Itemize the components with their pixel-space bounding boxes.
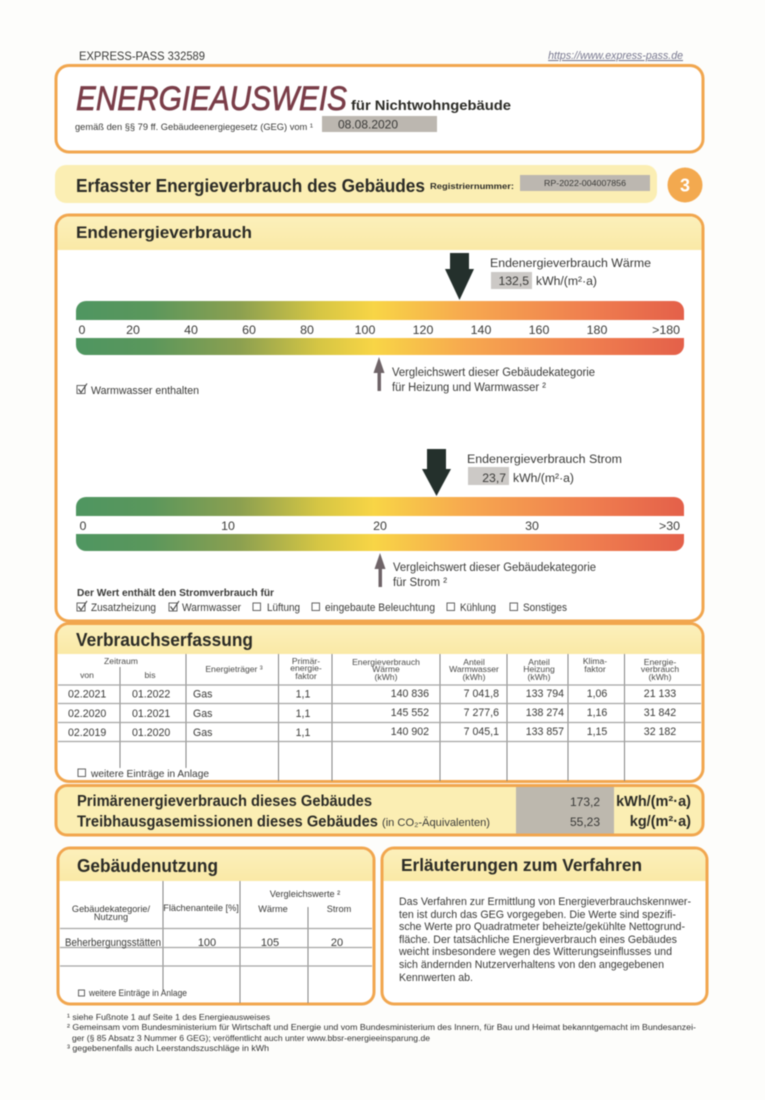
checkbox row: Warmwasser — [182, 602, 241, 614]
table grid — [58, 654, 701, 781]
arrow: electricity comparison — [374, 553, 386, 587]
table header: Flächenanteile [%] — [163, 903, 239, 913]
explanation text: fläche. Der tatsächliche Energieverbrauch eines Gebäudes — [399, 934, 677, 946]
panel: Endenergieverbrauch — [56, 215, 703, 621]
title: ENERGIEAUSWEIS — [76, 80, 347, 118]
heading: Gebäudenutzung — [77, 856, 218, 876]
legal basis: gemäß den §§ 79 ff. Gebäudeenergiegesetz (GEG) vom ¹ — [75, 121, 313, 132]
emissions row — [77, 814, 691, 830]
scale labels: heat: >180 — [652, 323, 680, 337]
arrow: heat comparison — [374, 357, 384, 391]
scale labels: heat: 100 — [355, 323, 375, 337]
scale labels: heat: 160 — [529, 323, 549, 337]
table header: Anteil — [463, 657, 485, 667]
primary energy row: kWh/(m²·a) — [616, 794, 691, 810]
footnotes: ger (§ 85 Absatz 3 Nummer 6 GEG); veröffentlicht auch unter www.bbsr-energieeinsparung.de — [72, 1033, 430, 1043]
table row: 100 — [198, 937, 216, 949]
table header: Warmwasser — [449, 664, 499, 674]
scale labels: electricity — [80, 519, 680, 533]
footnotes: ³ gegebenenfalls auch Leerstandszuschläge in kWh — [67, 1043, 269, 1053]
table header: verbrauch — [641, 664, 679, 674]
table row 2019: 7 045,1 — [464, 726, 499, 738]
checkbox row: Sonstiges — [523, 602, 567, 614]
table header: Klima- — [583, 656, 607, 666]
table header: faktor — [295, 671, 317, 681]
checkbox: hot water included: Warmwasser enthalten — [91, 385, 199, 397]
emissions row: Treibhausgasemissionen dieses Gebäudes — [77, 814, 378, 830]
table header: (kWh) — [463, 672, 486, 682]
table header: Anteil — [528, 657, 550, 667]
table header — [72, 889, 352, 922]
table header: Gebäudekategorie/ — [72, 904, 151, 914]
date field — [322, 116, 437, 132]
arrow: heat value — [445, 253, 474, 300]
table header: (kWh) — [528, 672, 551, 682]
scale bar: heat top — [76, 301, 684, 320]
panel: Gebäudenutzung — [58, 848, 374, 1004]
table row 2019: 133 857 — [526, 726, 564, 738]
section banner — [55, 165, 657, 203]
table row: 105 — [261, 937, 279, 949]
table row 2021: 140 836 — [391, 688, 429, 700]
heat value label: 132,5 — [498, 274, 529, 288]
heat value label: Endenergieverbrauch Wärme — [490, 256, 651, 270]
date field: 08.08.2020 — [338, 118, 398, 132]
scale labels: electricity: 0 — [80, 519, 87, 533]
section heading: Erfasster Energieverbrauch des Gebäudes — [76, 176, 425, 196]
table row 2021: 133 794 — [526, 688, 564, 700]
emissions row: 55,23 — [570, 815, 600, 829]
explanation text — [398, 896, 691, 984]
primary energy row — [77, 793, 691, 810]
table row 2021: 7 041,8 — [464, 688, 499, 700]
checkbox row: Zusatzheizung — [91, 602, 156, 614]
table row 2021: 1,1 — [296, 688, 310, 700]
electricity comparison label: für Strom ² — [393, 575, 447, 589]
panel: title — [56, 66, 703, 152]
table row 2020: 1,1 — [296, 708, 310, 720]
scale labels: electricity: 30 — [525, 519, 539, 533]
table header — [80, 656, 679, 682]
table row 2020: 31 842 — [644, 707, 676, 719]
explanation text: Kennwerten ab. — [399, 972, 473, 984]
website link: https://www.express-pass.de — [548, 50, 683, 62]
table header: Wärme — [258, 904, 288, 914]
scale labels: heat — [79, 323, 680, 337]
table row 2019: 1,1 — [296, 727, 310, 739]
page number badge: 3 — [680, 176, 690, 196]
table row — [65, 937, 343, 949]
table header: faktor — [584, 664, 606, 674]
checkbox row: Kühlung — [460, 602, 496, 614]
scale labels: heat: 120 — [413, 323, 433, 337]
table header: Heizung — [523, 664, 555, 674]
scale bar: electricity bottom — [76, 534, 684, 551]
table row 2020: 1,16 — [587, 707, 607, 719]
table header: Nutzung — [94, 912, 128, 922]
scale labels: heat: 140 — [471, 323, 491, 337]
table row: 20 — [331, 937, 343, 949]
table row 2021: 02.2021 — [68, 688, 106, 700]
table row 2019: 01.2020 — [132, 727, 170, 739]
table row 2021 — [68, 688, 676, 700]
electricity comparison label — [393, 560, 596, 589]
table row 2020: 7 277,6 — [464, 707, 499, 719]
table row 2021: 01.2022 — [132, 688, 170, 700]
table row 2020: 01.2021 — [132, 708, 170, 720]
further entries checkbox: weitere Einträge in Anlage — [90, 769, 209, 780]
page number badge — [668, 168, 702, 202]
table row 2020: 145 552 — [391, 707, 429, 719]
electricity contents note: Der Wert enthält den Stromverbrauch für — [77, 588, 274, 599]
table row 2021: 21 133 — [644, 688, 676, 700]
table header: Energie- — [644, 657, 676, 667]
table row: Beherbergungsstätten — [65, 937, 161, 949]
electricity value label: 23,7 — [482, 471, 506, 485]
table row 2019: 02.2019 — [68, 727, 106, 739]
electricity value label: kWh/(m²·a) — [513, 471, 574, 485]
scale labels: heat: 20 — [126, 323, 140, 337]
further entries checkbox: weitere Einträge in Anlage — [88, 987, 187, 998]
table row 2019 — [68, 726, 676, 739]
registration label: Registriernummer: — [430, 181, 514, 191]
registration number: RP-2022-004007856 — [544, 178, 626, 188]
heat value label: kWh/(m²·a) — [536, 274, 597, 288]
scale labels: electricity: >30 — [659, 519, 680, 533]
emissions row: kg/(m²·a) — [630, 814, 691, 830]
registration number — [520, 175, 650, 191]
footnotes: ² Gemeinsam vom Bundesministerium für Wirtschaft und Energie und vom Bundesministerium des Innern, für Bau und Heimat bekanntgemacht im Bundesanzei- — [67, 1022, 696, 1032]
explanation text: Das Verfahren zur Ermittlung von Energieverbrauchskennwer- — [399, 896, 691, 908]
table row 2020: 02.2020 — [68, 708, 106, 720]
table header: Zeitraum — [104, 656, 138, 666]
scale labels: heat: 80 — [300, 323, 314, 337]
table row 2019: 140 902 — [391, 726, 429, 738]
explanation text: sche Werte pro Quadratmeter beheizte/gekühlte Nettogrund- — [399, 921, 685, 933]
subtitle: für Nichtwohngebäude — [351, 97, 511, 113]
primary energy row: 173,2 — [570, 795, 600, 809]
footnotes: ¹ siehe Fußnote 1 auf Seite 1 des Energieausweises — [67, 1012, 270, 1022]
heading: Endenergieverbrauch — [76, 223, 252, 242]
heat comparison label: für Heizung und Warmwasser ² — [392, 380, 546, 394]
electricity value label: Endenergieverbrauch Strom — [467, 452, 622, 466]
scale labels: heat: 0 — [79, 323, 86, 337]
table header: bis — [144, 670, 156, 680]
scale labels: heat: 40 — [184, 323, 198, 337]
panel: Erläuterungen — [382, 848, 707, 1004]
heat comparison label: Vergleichswert dieser Gebäudekategorie — [392, 365, 595, 379]
electricity comparison label: Vergleichswert dieser Gebäudekategorie — [393, 560, 596, 574]
table header: (kWh) — [649, 672, 672, 682]
table header: Strom — [327, 904, 352, 914]
table header: Primär- — [292, 656, 320, 666]
table row 2021: Gas — [193, 688, 212, 700]
table row 2020: Gas — [193, 708, 212, 720]
document id: EXPRESS-PASS 332589 — [79, 51, 205, 63]
table row 2020 — [68, 707, 676, 720]
value field background — [516, 787, 614, 834]
heading: Erläuterungen zum Verfahren — [401, 855, 642, 875]
table grid — [60, 881, 372, 1003]
primary energy row: Primärenergieverbrauch dieses Gebäudes — [77, 793, 372, 810]
table header: Wärme — [372, 664, 400, 674]
table header: (kWh) — [375, 672, 398, 682]
table header: energie- — [290, 663, 322, 673]
scale labels: electricity: 20 — [373, 519, 387, 533]
explanation text: ten ist durch das GEG vorgegeben. Die Werte sind spezifi- — [399, 909, 676, 921]
panel: Verbrauchserfassung — [56, 624, 703, 782]
table header: Energieträger ³ — [205, 664, 263, 674]
scale bar: electricity top — [76, 497, 684, 516]
arrow: electricity value — [422, 449, 451, 496]
scale labels: heat: 180 — [587, 323, 607, 337]
table row 2019: 1,15 — [587, 726, 607, 738]
panel: primary energy and emissions — [56, 786, 703, 835]
checkbox row: Lüftung — [267, 602, 300, 614]
heading: Verbrauchserfassung — [76, 630, 253, 650]
table row 2021: 1,06 — [587, 688, 607, 700]
table row 2020: 138 274 — [526, 707, 564, 719]
explanation text: sich ändernden Nutzerverhaltens von den angegebenen — [399, 959, 664, 971]
table header: von — [80, 670, 94, 680]
table row 2019: 32 182 — [644, 726, 676, 738]
electricity value label — [467, 452, 622, 485]
heat comparison label — [392, 365, 595, 394]
scale labels: electricity: 10 — [221, 519, 235, 533]
table header: Vergleichswerte ² — [270, 889, 340, 899]
heat value label — [490, 256, 651, 289]
checkbox row — [77, 601, 567, 614]
explanation text: weicht insbesondere wegen des Witterungseinflusses und — [398, 946, 672, 958]
scale labels: heat: 60 — [242, 323, 256, 337]
table header: Energieverbrauch — [352, 657, 420, 667]
table row 2019: Gas — [193, 727, 212, 739]
checkbox row: eingebaute Beleuchtung — [325, 602, 435, 614]
scale bar: heat bottom — [76, 338, 684, 355]
emissions row: (in CO₂-Äquivalenten) — [382, 817, 490, 829]
footnotes — [67, 1012, 696, 1053]
